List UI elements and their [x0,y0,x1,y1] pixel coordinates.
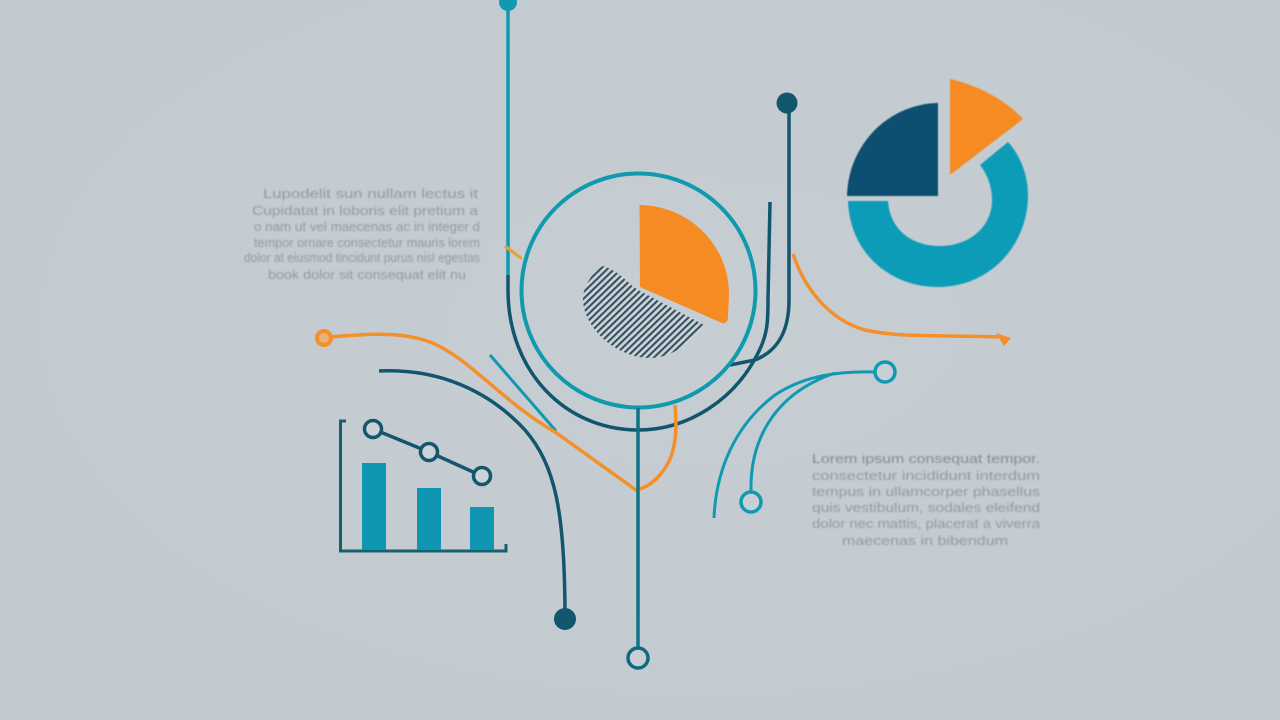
central circle [522,174,756,408]
connector: right teal outer curve with ring [714,362,895,518]
text block: upper left: Lupodelit sun nullam lectus it [263,186,478,201]
text block: lower right: maecenas in bibendum [842,533,1008,548]
text block: lower right: consectetur incididunt interdum [812,468,1040,483]
donut: dark quarter [847,103,938,196]
connector: top teal line with dot [499,0,517,275]
text block: upper left: o nam ut vel maecenas ac in integer d [254,219,480,234]
text block: lower right: tempus in ullamcorper phasellus [812,484,1041,499]
pie wedge: hatched [583,266,704,358]
bars [362,463,494,550]
donut: teal ring [848,142,1028,287]
connector: central vertical with bottom ring [628,408,648,668]
text block: lower right: quis vestibulum, sodales eleifend [812,500,1040,515]
connector: small orange tick [505,246,522,259]
connector: right orange line [793,254,1011,346]
donut: orange wedge [950,79,1023,175]
connector: dark curve with bottom dot [379,371,576,630]
text block: upper left: book dolor sit consequat elit nu [268,267,466,282]
connector: teal short diagonal [490,355,556,431]
text block: lower right: Lorem ipsum consequat tempor. [812,451,1040,466]
connector: right teal inner curve with ring [741,373,835,512]
connector: orange line with ring node [317,331,676,490]
trend line with markers [364,420,490,484]
bar chart [340,420,506,551]
chart axes [340,421,506,551]
text block: lower right: dolor nec mattis, placerat a viverra [812,516,1041,531]
text block: upper left: dolor at eiusmod tincidunt purus nisl egestas [244,250,480,265]
text block: lower right [812,451,1041,548]
connector: dark line with top dot [730,92,798,365]
text block: upper left: tempor ornare consectetur mauris lorem [254,235,480,250]
donut chart [847,79,1028,287]
text block: upper left [244,186,480,282]
text block: upper left: Cupidatat in loboris elit pretium a [252,203,479,218]
connector: dark ring arc with right riser [508,202,770,430]
pie wedge: orange [640,205,729,323]
